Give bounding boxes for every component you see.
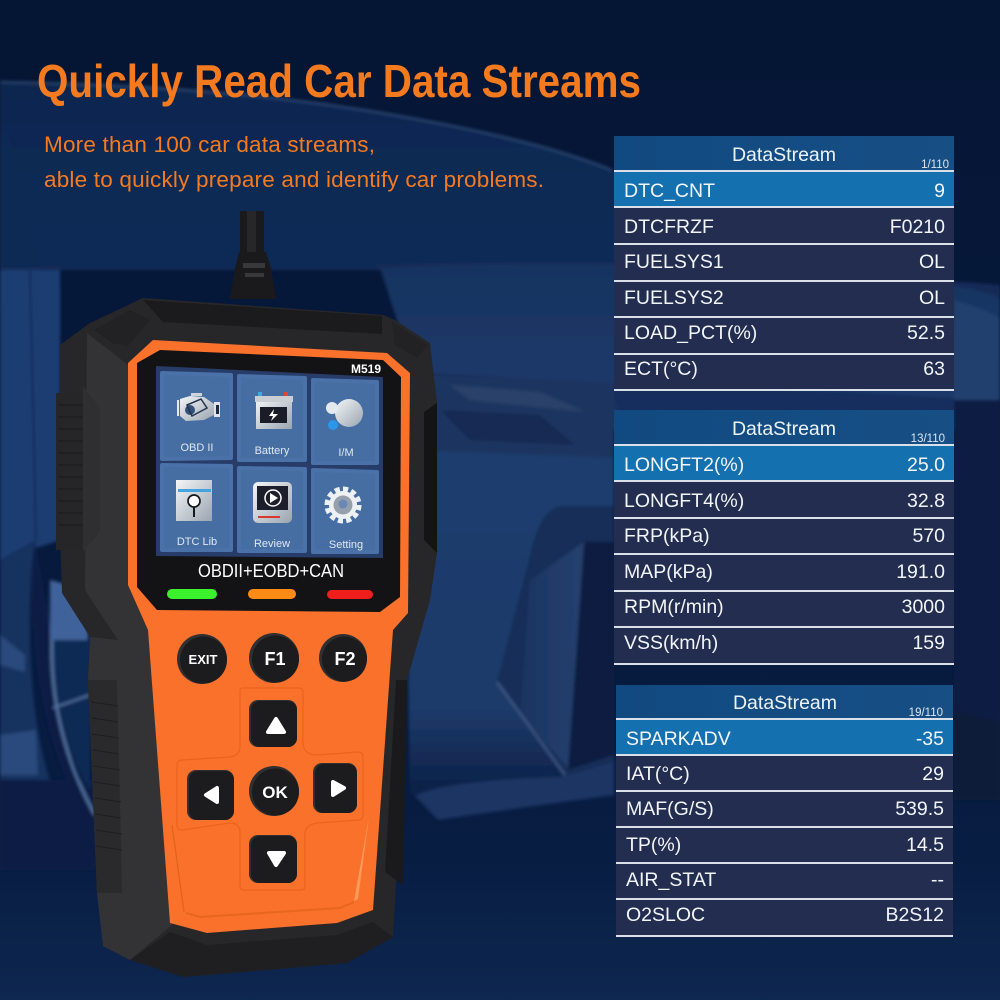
- left body side highlight: [85, 333, 172, 960]
- tile: Battery: Battery: [255, 445, 290, 457]
- cable: [230, 211, 276, 299]
- upper right corner bumper: [392, 322, 428, 358]
- screen black surround: [137, 350, 401, 612]
- highlighted row: LONGFT2: LONGFT2(%): [624, 454, 744, 476]
- highlighted row: SPARKADV: [616, 720, 953, 754]
- row: ECT: [624, 358, 945, 380]
- panel header: 1/110: [921, 159, 949, 171]
- device: OBD2 scanner: [56, 211, 437, 977]
- row: VSS: 159: [912, 632, 945, 654]
- bottom bumper: [130, 922, 393, 977]
- row: VSS: VSS(km/h): [624, 632, 718, 654]
- icon: video player: [253, 482, 292, 523]
- tile: Setting: Setting: [329, 539, 363, 551]
- button: EXIT: EXIT: [189, 652, 218, 667]
- row: TP: [626, 834, 944, 856]
- row: MAP: MAP(kPa): [624, 561, 713, 583]
- row: AIR_STAT: AIR_STAT: [626, 869, 716, 891]
- row: LONGFT4: LONGFT4(%): [624, 490, 744, 512]
- top plate: [143, 300, 382, 334]
- tile: Battery: [239, 376, 305, 460]
- subtitle text block: [44, 132, 544, 192]
- row: FUELSYS1: [624, 251, 945, 273]
- LCD screen: [156, 366, 383, 558]
- icon: engine: [177, 393, 220, 421]
- row: O2SLOC: [626, 904, 944, 926]
- upper left corner bumper: [94, 310, 150, 346]
- row: MAF: 539.5: [895, 798, 944, 820]
- indicator: green LED: [167, 589, 217, 599]
- highlighted row: LONGFT2: 25.0: [907, 454, 945, 476]
- icon: gear: [328, 490, 358, 520]
- row: FRP: 570: [912, 525, 945, 547]
- indicator: red LED: [327, 590, 373, 599]
- lower left grip: [88, 680, 150, 903]
- row: O2SLOC: O2SLOC: [626, 904, 705, 926]
- icon: battery: [255, 392, 293, 429]
- lower right side rail: [385, 680, 407, 885]
- row: ECT: ECT(°C): [624, 358, 698, 380]
- panel header: DataStream: [733, 692, 837, 714]
- button: F2: F2: [334, 649, 356, 669]
- row: LOAD_PCT: LOAD_PCT(%): [624, 322, 757, 344]
- row: ECT: 63: [923, 358, 945, 380]
- tile: OBD II: [162, 373, 231, 459]
- row: FUELSYS1: FUELSYS1: [624, 251, 724, 273]
- highlighted row: DTC_CNT: [614, 172, 954, 206]
- highlighted row: SPARKADV: SPARKADV: [626, 728, 731, 750]
- button: F2: [319, 634, 367, 682]
- row: FUELSYS2: OL: [919, 287, 945, 309]
- row: FUELSYS1: OL: [919, 251, 945, 273]
- row: RPM: 3000: [902, 596, 945, 618]
- panel: data stream 19/110: [616, 685, 953, 937]
- highlighted row: LONGFT2: [614, 446, 954, 480]
- highlighted row: DTC_CNT: DTC_CNT: [624, 180, 715, 202]
- panel header: [614, 410, 954, 445]
- row: FRP: FRP(kPa): [624, 525, 710, 547]
- indicator: orange LED: [248, 589, 296, 599]
- panel: data stream 13/110: [614, 410, 954, 665]
- highlighted row: DTC_CNT: 9: [934, 180, 945, 202]
- row: AIR_STAT: --: [931, 869, 944, 891]
- row: MAF: MAF(G/S): [626, 798, 714, 820]
- button: F1: [249, 633, 299, 683]
- protocol label: OBDII+EOBD+CAN: [198, 561, 344, 581]
- row: FRP: [624, 525, 945, 547]
- row: MAF: [626, 798, 944, 820]
- row: RPM: RPM(r/min): [624, 596, 724, 618]
- row: DTCFRZF: [624, 216, 945, 238]
- row: DTCFRZF: DTCFRZF: [624, 216, 714, 238]
- icon: bubbles: [326, 399, 363, 430]
- title: Quickly Read Car Data Streams: [37, 55, 641, 107]
- row: O2SLOC: B2S12: [885, 904, 944, 926]
- row: AIR_STAT: [626, 869, 944, 891]
- keypad cross outline: [177, 688, 363, 890]
- row: IAT: [626, 763, 944, 785]
- row: MAP: [624, 561, 945, 583]
- row: LONGFT4: 32.8: [907, 490, 945, 512]
- panel header: 13/110: [911, 433, 945, 445]
- button: right arrow: [313, 763, 357, 813]
- tile: DTC Lib: [162, 465, 231, 550]
- row: FUELSYS2: FUELSYS2: [624, 287, 724, 309]
- row: FUELSYS2: [624, 287, 945, 309]
- tile: I/M: [313, 380, 377, 463]
- subtitle text block: able to quickly prepare and identify car problems.: [44, 167, 544, 192]
- highlighted row: SPARKADV: -35: [916, 728, 944, 750]
- row: VSS: [624, 632, 945, 654]
- panel header: [614, 136, 954, 171]
- row: MAP: 191.0: [896, 561, 945, 583]
- tile: Review: Review: [254, 538, 290, 550]
- row: IAT: 29: [922, 763, 944, 785]
- row: TP: TP(%): [626, 834, 681, 856]
- keypad highlight: [172, 817, 369, 917]
- tile: I/M: I/M: [338, 447, 354, 459]
- right side button: [424, 403, 437, 553]
- row: DTCFRZF: F0210: [890, 216, 945, 238]
- button: F1: F1: [264, 649, 286, 669]
- panel: data stream 1/110: [614, 136, 954, 391]
- tile: Review: [239, 468, 305, 551]
- panel header: [616, 685, 953, 719]
- panel header: 19/110: [909, 707, 943, 719]
- row: RPM: [624, 596, 945, 618]
- button: EXIT: [177, 634, 227, 684]
- tile: DTC Lib: DTC Lib: [177, 536, 217, 548]
- panel header: DataStream: [732, 144, 836, 166]
- tile: OBD II: OBD II: [180, 442, 214, 454]
- row: LOAD_PCT: [624, 322, 945, 344]
- upper left grip: [56, 386, 100, 552]
- button: OK: [249, 766, 299, 816]
- row: TP: 14.5: [906, 834, 944, 856]
- button: down arrow: [249, 835, 297, 883]
- row: LONGFT4: [624, 490, 945, 512]
- button: OK: OK: [262, 783, 288, 802]
- row: LOAD_PCT: 52.5: [907, 322, 945, 344]
- icon: search document: [176, 480, 212, 521]
- button: up arrow: [249, 700, 297, 747]
- rubber body: [60, 298, 437, 977]
- panel header: DataStream: [732, 418, 836, 440]
- row: IAT: IAT(°C): [626, 763, 690, 785]
- orange bezel: [128, 340, 410, 933]
- subtitle text block: More than 100 car data streams,: [44, 132, 375, 157]
- model label: M519: [351, 362, 381, 376]
- tile: Setting: [313, 470, 377, 552]
- button: left arrow: [187, 770, 234, 820]
